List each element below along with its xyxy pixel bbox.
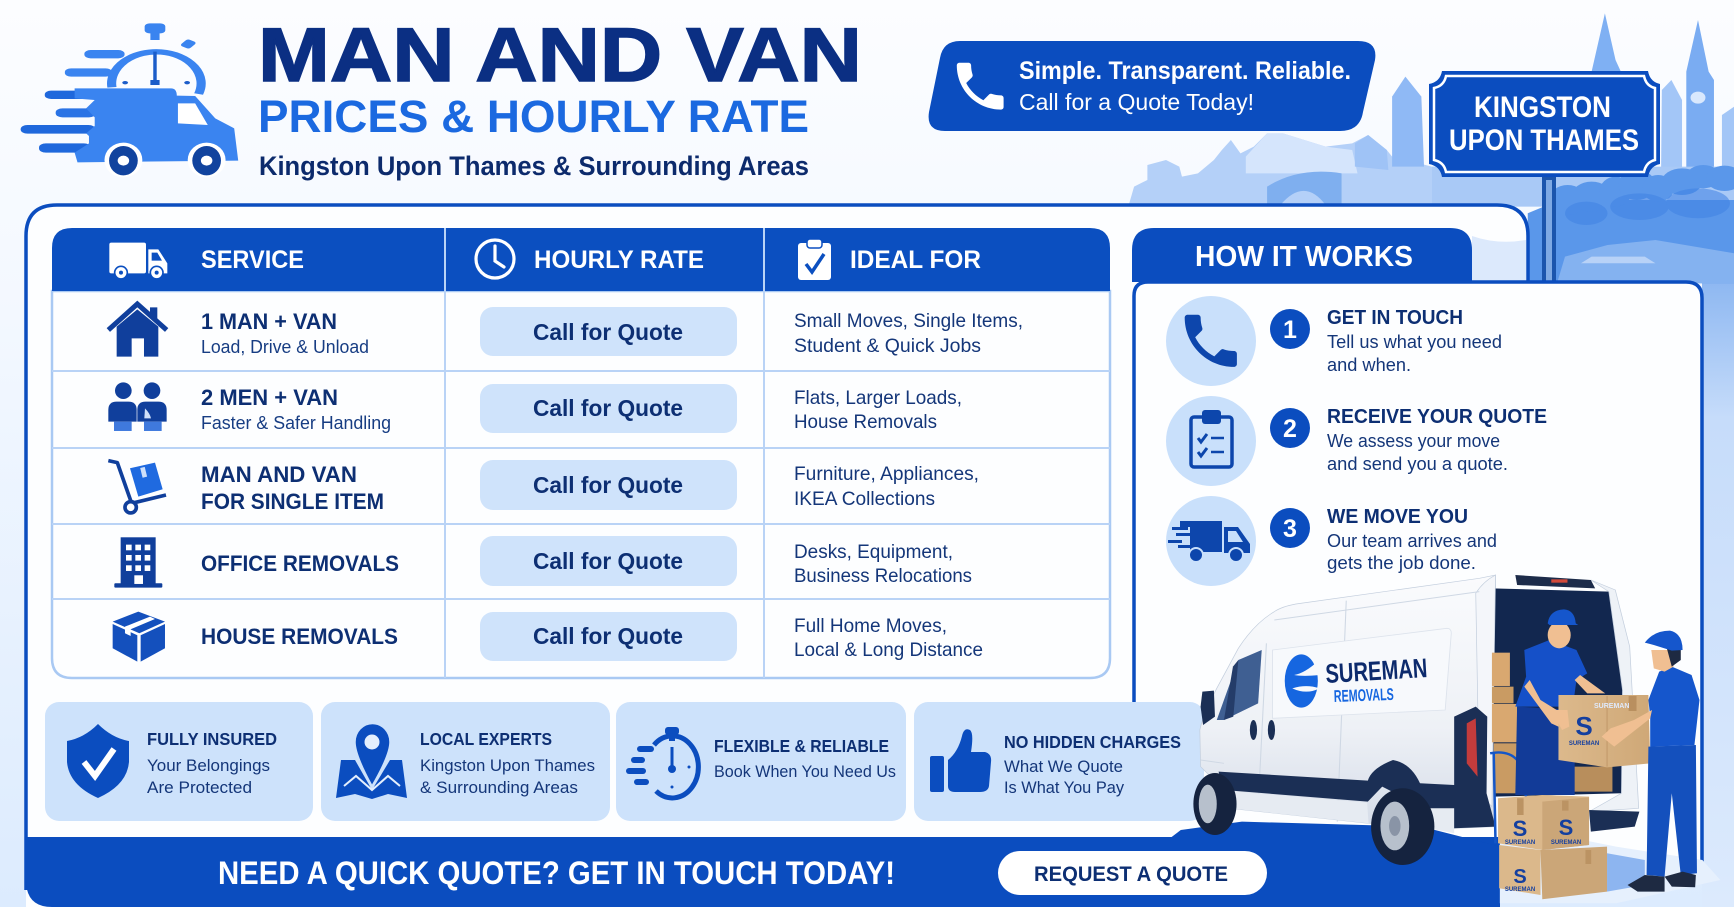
row: house removals: HOUSE REMOVALS — [201, 624, 398, 649]
banner: simple transparent reliable: Call for a Quote Today! — [1019, 89, 1254, 115]
step 1: Tell us what you need — [1327, 331, 1502, 352]
step 1: GET IN TOUCH — [1327, 307, 1463, 329]
illustration: van with movers: REMOVALS — [1333, 685, 1394, 706]
request a quote button — [998, 851, 1267, 895]
row: 2 men + van — [108, 382, 391, 433]
ideal for column: Small Moves, Single Items, — [794, 310, 1023, 332]
mover inside van — [1515, 707, 1575, 795]
feature card: local experts: LOCAL EXPERTS — [420, 729, 552, 749]
van body — [1200, 575, 1496, 828]
feature card: local experts: Kingston Upon Thames — [420, 756, 595, 775]
heading tab: HOW IT WORKS — [1195, 241, 1413, 273]
ideal for column: Student & Quick Jobs — [794, 335, 981, 357]
banner: simple transparent reliable: Simple. Transparent. Reliable. — [1019, 57, 1351, 85]
ideal for column: Full Home Moves, — [794, 615, 947, 637]
feature card: no hidden charges: Is What You Pay — [1004, 778, 1124, 797]
feature card: flexible and reliable: FLEXIBLE & RELIABLE — [714, 736, 889, 756]
row: 1 man + van — [108, 304, 369, 357]
feature card: fully insured — [45, 702, 313, 821]
request a quote button: REQUEST A QUOTE — [1034, 862, 1228, 886]
feature card: fully insured: FULLY INSURED — [147, 729, 277, 749]
illustration: van with movers — [1170, 575, 1720, 907]
row: single item: FOR SINGLE ITEM — [201, 489, 384, 514]
cargo boxes — [1492, 653, 1612, 793]
box lettering: S — [1513, 866, 1527, 888]
icon: phone — [957, 63, 1004, 110]
row: 1 man + van: Load, Drive & Unload — [201, 337, 369, 357]
table header: IDEAL FOR — [850, 246, 981, 274]
icon: header clipboard — [798, 239, 831, 280]
table header — [201, 246, 981, 274]
ideal for column: Desks, Equipment, — [794, 541, 953, 563]
step 3: 3 — [1283, 515, 1297, 543]
feature card: local experts — [321, 702, 610, 821]
box lettering: S — [1559, 815, 1573, 840]
call to action bar: NEED A QUICK QUOTE? GET IN TOUCH TODAY! — [218, 855, 895, 891]
mover outside van — [1647, 745, 1697, 877]
ideal for column: Local & Long Distance — [794, 639, 983, 661]
icon: header clock — [476, 240, 514, 278]
box lettering: SUREMAN — [1569, 741, 1599, 747]
box lettering: S — [1513, 816, 1527, 841]
row: house removals — [113, 612, 398, 662]
step 2 — [1166, 396, 1547, 486]
row: office removals: OFFICE REMOVALS — [201, 551, 399, 576]
ideal for column: Furniture, Appliances, — [794, 463, 979, 485]
box lettering: S — [1575, 711, 1593, 741]
icon: header truck — [109, 243, 167, 279]
row: 2 men + van: Faster & Safer Handling — [201, 413, 391, 433]
ideal for column: Flats, Larger Loads, — [794, 387, 962, 409]
step 1 — [1166, 296, 1502, 386]
title — [258, 13, 862, 181]
hourly rate pills: Call for Quote — [533, 395, 683, 421]
call to action bar — [26, 837, 1500, 907]
hourly rate pills — [480, 307, 737, 661]
subtitle: prices: PRICES & HOURLY RATE — [258, 91, 809, 142]
row: 2 men + van: 2 MEN + VAN — [201, 385, 338, 410]
step 2: RECEIVE YOUR QUOTE — [1327, 406, 1547, 428]
feature card: flexible and reliable: Book When You Need Us — [714, 762, 896, 781]
feature card: fully insured: Your Belongings — [147, 756, 270, 775]
step 2: and send you a quote. — [1327, 453, 1508, 474]
box lettering: SUREMAN — [1505, 840, 1535, 846]
feature card: no hidden charges — [914, 702, 1204, 821]
ideal for column — [794, 310, 1023, 661]
table: services — [52, 228, 1110, 678]
box lettering: SUREMAN — [1594, 703, 1629, 710]
table header: HOURLY RATE — [534, 246, 704, 274]
hourly rate pills: Call for Quote — [533, 548, 683, 574]
skyline illustration — [1129, 13, 1734, 907]
box lettering: SUREMAN — [1551, 840, 1581, 846]
feature card: flexible and reliable — [616, 702, 906, 821]
feature card: no hidden charges: NO HIDDEN CHARGES — [1004, 732, 1181, 752]
ideal for column: Business Relocations — [794, 565, 972, 587]
heading tab — [1132, 228, 1472, 282]
hourly rate pills: Call for Quote — [533, 472, 683, 498]
row: single item — [108, 461, 384, 514]
hourly rate pills: Call for Quote — [533, 623, 683, 649]
sign: Kingston upon Thames: KINGSTON — [1474, 91, 1611, 124]
header logo: van and stopwatch — [21, 23, 238, 177]
box lettering — [1505, 703, 1629, 893]
step 3: gets the job done. — [1327, 552, 1476, 573]
step 3: Our team arrives and — [1327, 530, 1497, 551]
panel: how it works — [1132, 228, 1702, 878]
title: MAN AND VAN — [258, 13, 862, 98]
step 3 — [1166, 496, 1497, 586]
outer panel — [26, 205, 1528, 907]
row: single item: MAN AND VAN — [201, 462, 357, 487]
step 1: 1 — [1283, 316, 1297, 344]
step 2: 2 — [1283, 415, 1297, 443]
feature card: no hidden charges: What We Quote — [1004, 757, 1123, 776]
feature card: fully insured: Are Protected — [147, 778, 252, 797]
row: office removals — [114, 537, 399, 588]
sign: Kingston upon Thames — [1429, 71, 1660, 282]
box lettering: SUREMAN — [1505, 887, 1535, 893]
stacked boxes — [1498, 795, 1589, 850]
ideal for column: House Removals — [794, 411, 937, 433]
sign: Kingston upon Thames: UPON THAMES — [1449, 124, 1639, 157]
step 1: and when. — [1327, 354, 1411, 375]
subtitle: area: Kingston Upon Thames & Surrounding Areas — [259, 151, 809, 181]
ideal for column: IKEA Collections — [794, 488, 935, 510]
row: 1 man + van: 1 MAN + VAN — [201, 309, 337, 334]
feature card: local experts: & Surrounding Areas — [420, 778, 578, 797]
hourly rate pills: Call for Quote — [533, 319, 683, 345]
table header: SERVICE — [201, 246, 304, 274]
van lettering: SUREMAN — [1325, 653, 1428, 689]
van logo mark — [1285, 654, 1318, 708]
dark lower trim — [1219, 707, 1496, 828]
step 3: WE MOVE YOU — [1327, 506, 1468, 528]
step 2: We assess your move — [1327, 430, 1500, 451]
banner: simple transparent reliable — [929, 41, 1375, 131]
